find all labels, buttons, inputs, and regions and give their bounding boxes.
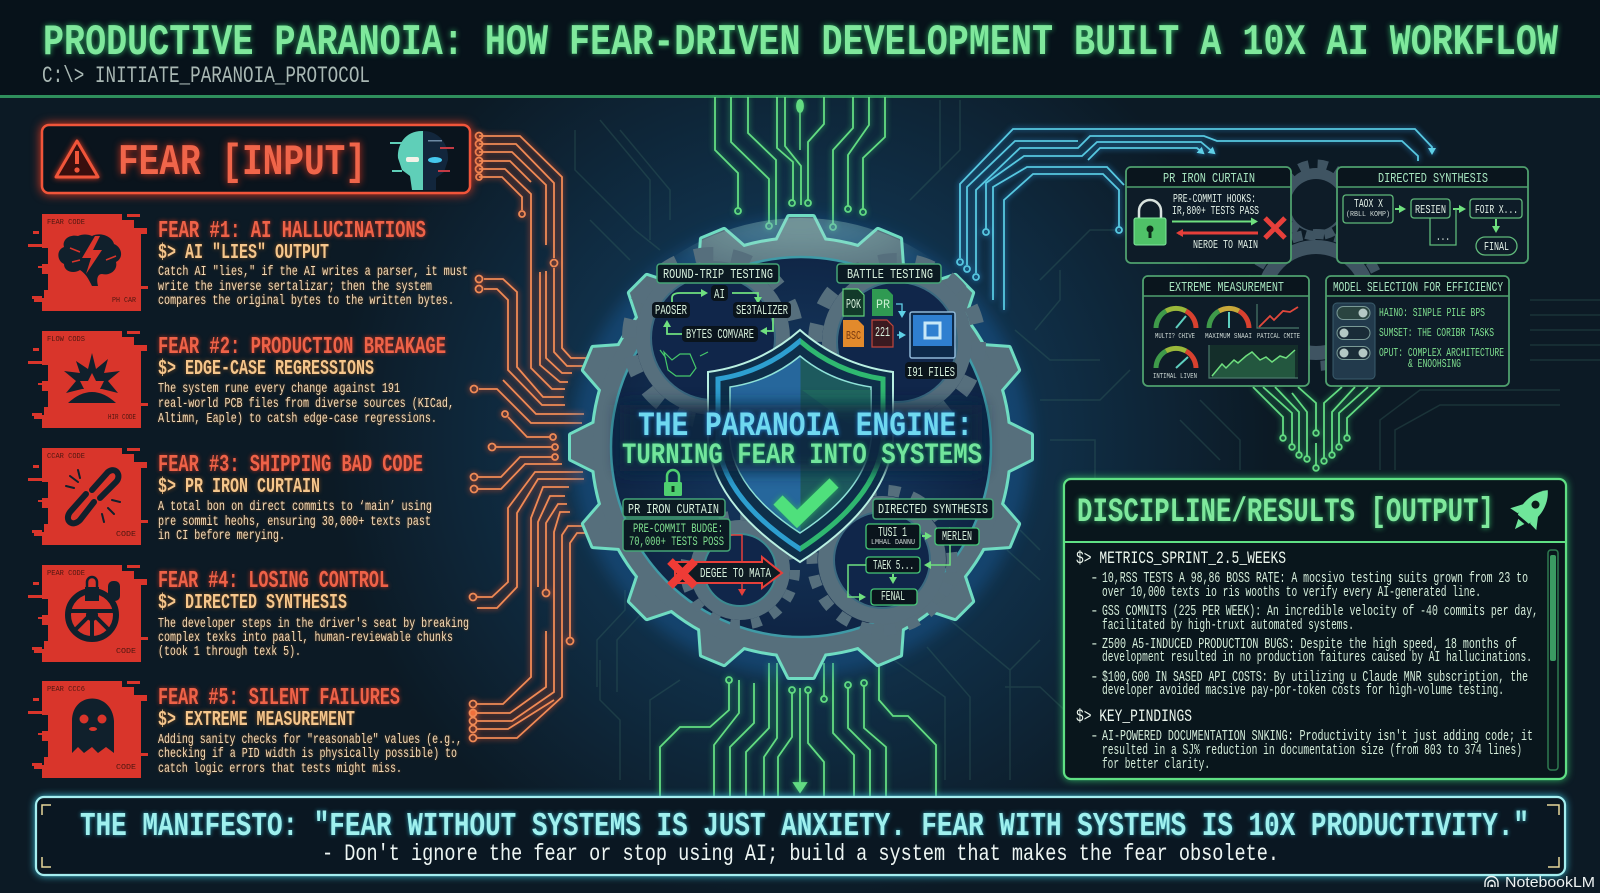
icon: rocket [1502,479,1561,540]
description: compares the original bytes to the written bytes. [158,293,454,309]
panel: extreme measurement: MAXIMUM SNAAI [1205,333,1252,341]
header bar [0,0,1600,98]
panel: directed synthesis [1337,167,1528,263]
panel: pr iron curtain: IR,800+ TESTS PASS [1172,204,1259,218]
module: directed synthesis: LMHAL DANNU [871,539,915,547]
metrics block: facilitated by high-truxt automated systems. [1102,618,1354,634]
gauge 2 [1209,308,1249,328]
green circuit traces above the engine [715,97,885,230]
icon: padlock [1134,200,1166,245]
watermark: NotebookLM: NotebookLM [1505,875,1595,891]
module: battle testing: PR [876,297,890,312]
blue circuit traces toward the system panels [957,129,1432,310]
icon: steering wheel with lock: PEAR CODE [47,570,85,578]
description [158,616,469,660]
panel: fear 4 [28,565,469,662]
metrics block [1076,549,1538,699]
panel: fear 1 [28,214,468,311]
icon: ghost: PEAR CCC6 [47,686,85,694]
heading: FEAR #1: AI HALLUCINATIONS [158,218,426,245]
heading: FEAR #3: SHIPPING BAD CODE [158,452,423,479]
panel: directed synthesis: FINAL [1484,240,1509,254]
module: round-trip testing: BYTES COMVARE [686,327,754,343]
panel: pr iron curtain: NEROE TO MAIN [1193,238,1258,252]
description [158,381,454,427]
panel: directed synthesis: RESIEN [1415,203,1446,217]
main gear: the paranoia engine [571,197,1031,677]
manifesto subline: - Don't ignore the fear or stop using AI; build a system that makes the fear obsolete. [322,841,1279,868]
arrow: merge to main [675,557,782,588]
heading: FEAR #5: SILENT FAILURES [158,685,400,712]
module: directed synthesis: DIRECTED SYNTHESIS [878,502,988,518]
panel title: EXTREME MEASUREMENT [1169,280,1284,296]
module: pr iron curtain [623,470,782,594]
heading: FEAR #2: PRODUCTION BREAKAGE [158,334,446,361]
module: pr iron curtain: DEGEE TO MATA [700,566,771,582]
subheading: $> EDGE-CASE REGRESSIONS [158,358,374,381]
engine title line 2: TURNING FEAR INTO SYSTEMS [622,439,982,473]
red line chart [1257,304,1299,328]
panel title: PR IRON CURTAIN [1163,171,1255,187]
panel: model selection: SUMSET: THE CORIBR TASKS [1379,326,1494,340]
heading: FEAR #4: LOSING CONTROL [158,568,389,595]
label [623,499,725,517]
module: directed synthesis: TAEK 5... [873,558,914,574]
icon: explosion: FLOW CODS [47,336,85,344]
icon: monitor [910,312,955,358]
key findings block: for better clarity. [1102,757,1210,773]
heading: fear input: FEAR [INPUT] [118,138,366,188]
key findings block: $> KEY_PINDINGS [1076,707,1192,727]
description [158,499,432,544]
module: round-trip testing: SE3TALIZER [736,303,788,319]
module: pr iron curtain: PRE-COMMIT BUDGE: [633,521,723,536]
icon: broken chain [28,448,148,545]
description: Altimn, Eaple) to catsh edge-case regressions. [158,411,437,427]
panel: model selection [1326,276,1509,386]
metrics block: $> METRICS_SPRINT_2.5_WEEKS [1076,549,1286,569]
module: battle testing: I91 FILES [907,365,955,381]
key findings block [1076,707,1533,773]
subheading: $> DIRECTED SYNTHESIS [158,592,347,615]
description: Catch AI "lies," if the AI writes a parser, it must [158,264,468,280]
panel: directed synthesis: TAOX X [1354,197,1383,211]
panel: pr iron curtain [1126,167,1291,263]
description: write the inverse sertalizar; then the system [158,279,432,295]
panel: extreme measurement [1143,276,1309,386]
icon: lock [664,470,682,496]
description: Adding sanity checks for "reasonable" values (e.g., [158,732,462,748]
metrics block: - [1090,571,1099,587]
panel: directed synthesis: (RBLL KOMP) [1346,211,1390,219]
icon: explosion [28,331,148,428]
panel: extreme measurement: INTIMAL LIVEN [1153,373,1197,381]
panel: directed synthesis: ... [1436,230,1450,244]
icon: red x [670,561,695,586]
gauge 1 [1156,308,1196,328]
icon: explosion: HIR CODE [108,414,136,422]
module: round-trip testing: ROUND-TRIP TESTING [663,267,773,283]
panel: discipline results output [1064,479,1566,779]
panel: model selection: HAINO: SINPLE PILE BPS [1379,306,1485,320]
subheading: $> EXTREME MEASUREMENT [158,709,355,732]
description: checking if a PID width is physically possible) to [158,746,457,762]
small gears inside engine [629,254,979,630]
panel title: MODEL SELECTION FOR EFFICIENCY [1333,280,1503,296]
panel: pr iron curtain: PRE-COMMIT HOOKS: [1173,192,1256,206]
description [158,264,468,309]
module: battle testing: BATTLE TESTING [847,267,933,283]
engine title line 1: THE PARANOIA ENGINE: [638,408,973,446]
description: The developer steps in the driver's seat by breaking [158,616,469,632]
module: pr iron curtain: PR IRON CURTAIN [628,502,719,518]
subheading: $> PR IRON CURTAIN [158,476,320,499]
icon: glitched AI face [390,131,454,190]
panel: fear input header [42,125,470,193]
subheading: $> AI "LIES" OUTPUT [158,242,329,265]
module: round-trip testing: AI [714,287,725,303]
faint background circuit traces [575,100,1600,780]
icon: broken chain: CODE [116,531,136,539]
module: battle testing: BSC [846,329,861,343]
icon: warning triangle [56,141,98,177]
description: A total bon on direct commits to ‘main’ using [158,499,432,515]
metrics block: - [1090,670,1099,686]
description: catch logic errors that tests might miss. [158,761,402,777]
description: complex texks into paall, human-reviewable chunks [158,630,453,646]
green circuit traces below the engine [660,652,936,796]
toggles [1333,303,1375,379]
panel: extreme measurement: MULTI? CHIVE [1155,333,1195,341]
label [837,264,941,283]
icon: brain with lightning [28,214,148,311]
icon: broken chain: CCAR CODE [47,453,85,461]
panel: model selection: & ENOOHSING [1408,357,1461,371]
module: battle testing [837,264,957,381]
panel: fear 5 [28,681,462,778]
panel title: DIRECTED SYNTHESIS [1378,171,1488,187]
panel: directed synthesis: FOIR X... [1475,203,1518,217]
metrics block: - [1090,637,1099,653]
panel: extreme measurement: PATICAL CMITE [1257,333,1300,341]
module: battle testing: POK [846,297,861,313]
icon: brain with lightning: FEAR CODE [47,219,85,227]
green circuit traces from panels to output [1253,387,1380,471]
icon: ghost [28,681,148,778]
engine title band [620,405,982,473]
module: directed synthesis: FENAL [881,589,905,605]
description: in CI before merying. [158,528,285,544]
green area chart [1209,345,1298,378]
description: real-world PCB files from diverse sources (KICad, [158,396,454,412]
orange circuit traces from fear column into the engine [470,132,598,742]
description: (took 1 through texk 5). [158,644,301,660]
gray gears behind system panels [1250,164,1382,366]
description: pre sommit heohs, ensuring 30,000+ texts past [158,514,431,530]
icon: check mark [778,483,834,519]
icon: brain with lightning: PH CAR [112,297,137,305]
description: The system rune every change against 191 [158,381,400,397]
label [657,264,779,283]
icon: steering wheel with lock: CODE [116,648,136,656]
icon: ghost: CODE [116,764,136,772]
module: pr iron curtain: 70,000+ TESTS POSS [629,534,724,549]
module: directed synthesis [848,499,993,605]
module: directed synthesis: MERLEN [942,529,972,545]
label [873,499,993,519]
module: battle testing: 221 [875,325,890,341]
module: round-trip testing: PAOSER [655,303,687,319]
panel: manifesto [36,797,1565,875]
subtitle prompt: C:\> INITIATE_PARANOIA_PROTOCOL [42,63,370,89]
icon: steering wheel with lock [28,565,148,662]
gauge 3 [1156,348,1196,368]
panel: fear 3 [28,448,432,545]
central shield [708,330,893,562]
panel: fear 2 [28,331,454,428]
key findings block: - [1090,729,1099,745]
scrollbar [1548,550,1558,770]
description [158,732,462,777]
module: round-trip testing [652,264,791,376]
metrics block: - [1090,604,1099,620]
panel: model selection: OPUT: COMPLEX ARCHITECTURE [1379,346,1504,360]
module: directed synthesis: TUSI 1 [878,525,907,541]
